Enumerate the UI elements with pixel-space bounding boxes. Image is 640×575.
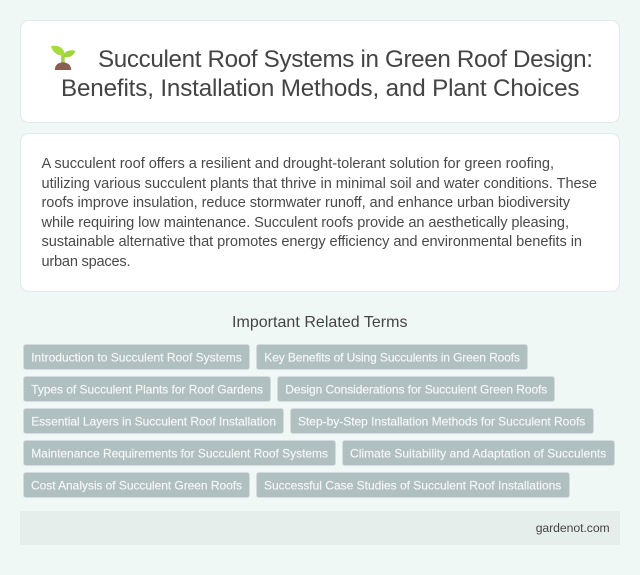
description text: urban spaces. (42, 254, 130, 270)
tag (24, 440, 336, 466)
tag: Successful Case Studies of Succulent Roof Installations (264, 478, 561, 492)
tag: Climate Suitability and Adaptation of Succulents (350, 446, 606, 460)
tag (342, 440, 614, 466)
description text: utilizing various succulent plants that thrive in minimal soil and water conditions. These (42, 176, 597, 192)
tag: Maintenance Requirements for Succulent Roof Systems (31, 446, 328, 460)
tag (24, 344, 250, 370)
tag: Types of Succulent Plants for Roof Gardens (31, 382, 263, 396)
icon: seedling (51, 46, 75, 70)
title: Succulent Roof Systems in Green Roof Design: (98, 46, 593, 73)
tag: Essential Layers in Succulent Roof Installation (31, 414, 276, 428)
footer bar (20, 511, 620, 545)
title (61, 46, 593, 102)
description text: sustainable alternative that promotes energy efficiency and environmental benefits in (42, 234, 582, 250)
tag (256, 344, 528, 370)
related terms tags (24, 344, 614, 498)
description text (40, 156, 597, 270)
footer source: gardenot.com (536, 521, 610, 535)
description text: roofs improve insulation, reduce stormwater runoff, and enhance urban biodiversity (42, 195, 571, 211)
tag (24, 472, 250, 498)
heading: related terms: Important Related Terms (232, 314, 408, 331)
tag (256, 472, 570, 498)
tag: Key Benefits of Using Succulents in Green Roofs (264, 350, 520, 364)
panel: title card (20, 20, 620, 122)
tag: Step-by-Step Installation Methods for Succulent Roofs (298, 414, 585, 428)
tag: Introduction to Succulent Roof Systems (31, 350, 242, 364)
description text: A succulent roof offers a resilient and drought-tolerant solution for green roofing, (42, 156, 554, 172)
description text: while requiring low maintenance. Succulent roofs provide an aesthetically pleasing, (40, 215, 569, 231)
panel: description card (20, 134, 620, 292)
tag: Cost Analysis of Succulent Green Roofs (31, 478, 242, 492)
tag (24, 408, 284, 434)
title: Benefits, Installation Methods, and Plant Choices (61, 75, 580, 102)
tag: Design Considerations for Succulent Green Roofs (285, 382, 547, 396)
tag (278, 376, 554, 402)
tag (24, 376, 270, 402)
tag (290, 408, 594, 434)
